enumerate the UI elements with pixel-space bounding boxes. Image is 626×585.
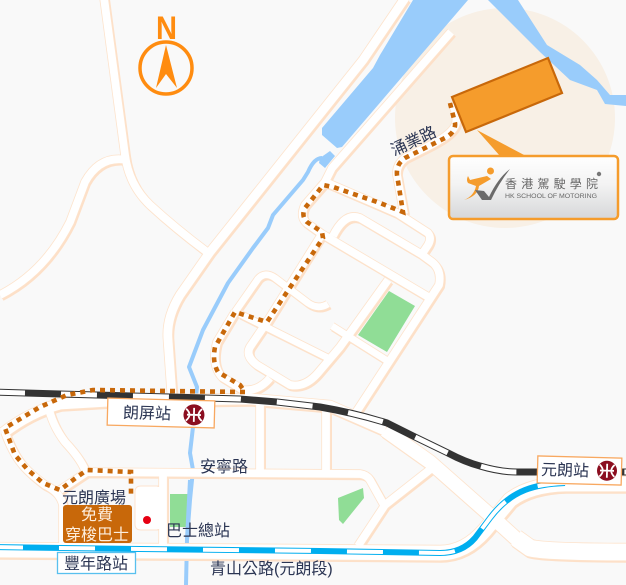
free shuttle bus badge: 免費 (81, 506, 113, 524)
bus terminus marker (143, 516, 151, 524)
station box: 元朗站 (537, 456, 622, 485)
label: 元朗廣場: 元朗廣場 (62, 489, 126, 507)
icon: MTR logo (597, 460, 617, 481)
park: triangular green (338, 488, 364, 524)
park: estate green (358, 291, 415, 352)
icon: MTR logo (183, 404, 205, 426)
shuttle route: dotted path (5, 103, 455, 497)
label: 青山公路(元朗段): 青山公路(元朗段) (210, 560, 333, 578)
school logo card: HK SCHOOL OF MOTORING (505, 193, 597, 200)
station box: 豐年路站 (58, 552, 136, 574)
road label: 涌業路: 涌業路 (388, 123, 439, 160)
river over bus terminus green (187, 480, 190, 540)
station box: 元朗站: 元朗站 (541, 461, 589, 480)
free shuttle bus badge (63, 505, 132, 544)
lake (322, 0, 468, 148)
free shuttle bus badge: 穿梭巴士 (65, 526, 129, 544)
west rail line (0, 392, 626, 472)
tuen ma line (0, 483, 565, 553)
station box: 朗屏站 (107, 398, 215, 428)
river outlet pond (319, 151, 335, 168)
thin river (186, 158, 322, 585)
logo figure (464, 168, 510, 200)
road label: 安寧路: 安寧路 (200, 458, 248, 476)
upper right river (488, 0, 626, 106)
school logo card (449, 156, 618, 219)
compass (140, 10, 192, 94)
compass: N (156, 10, 177, 46)
station box: 豐年路站: 豐年路站 (64, 555, 128, 573)
school area highlight circle (395, 8, 615, 228)
school building (452, 58, 562, 132)
school logo card: 香港駕駛學院 (505, 177, 598, 191)
station box: 朗屏站: 朗屏站 (123, 404, 171, 423)
park: bus terminus green (170, 494, 188, 527)
callout pointer (477, 130, 526, 156)
label: 巴士總站: 巴士總站 (166, 522, 230, 540)
